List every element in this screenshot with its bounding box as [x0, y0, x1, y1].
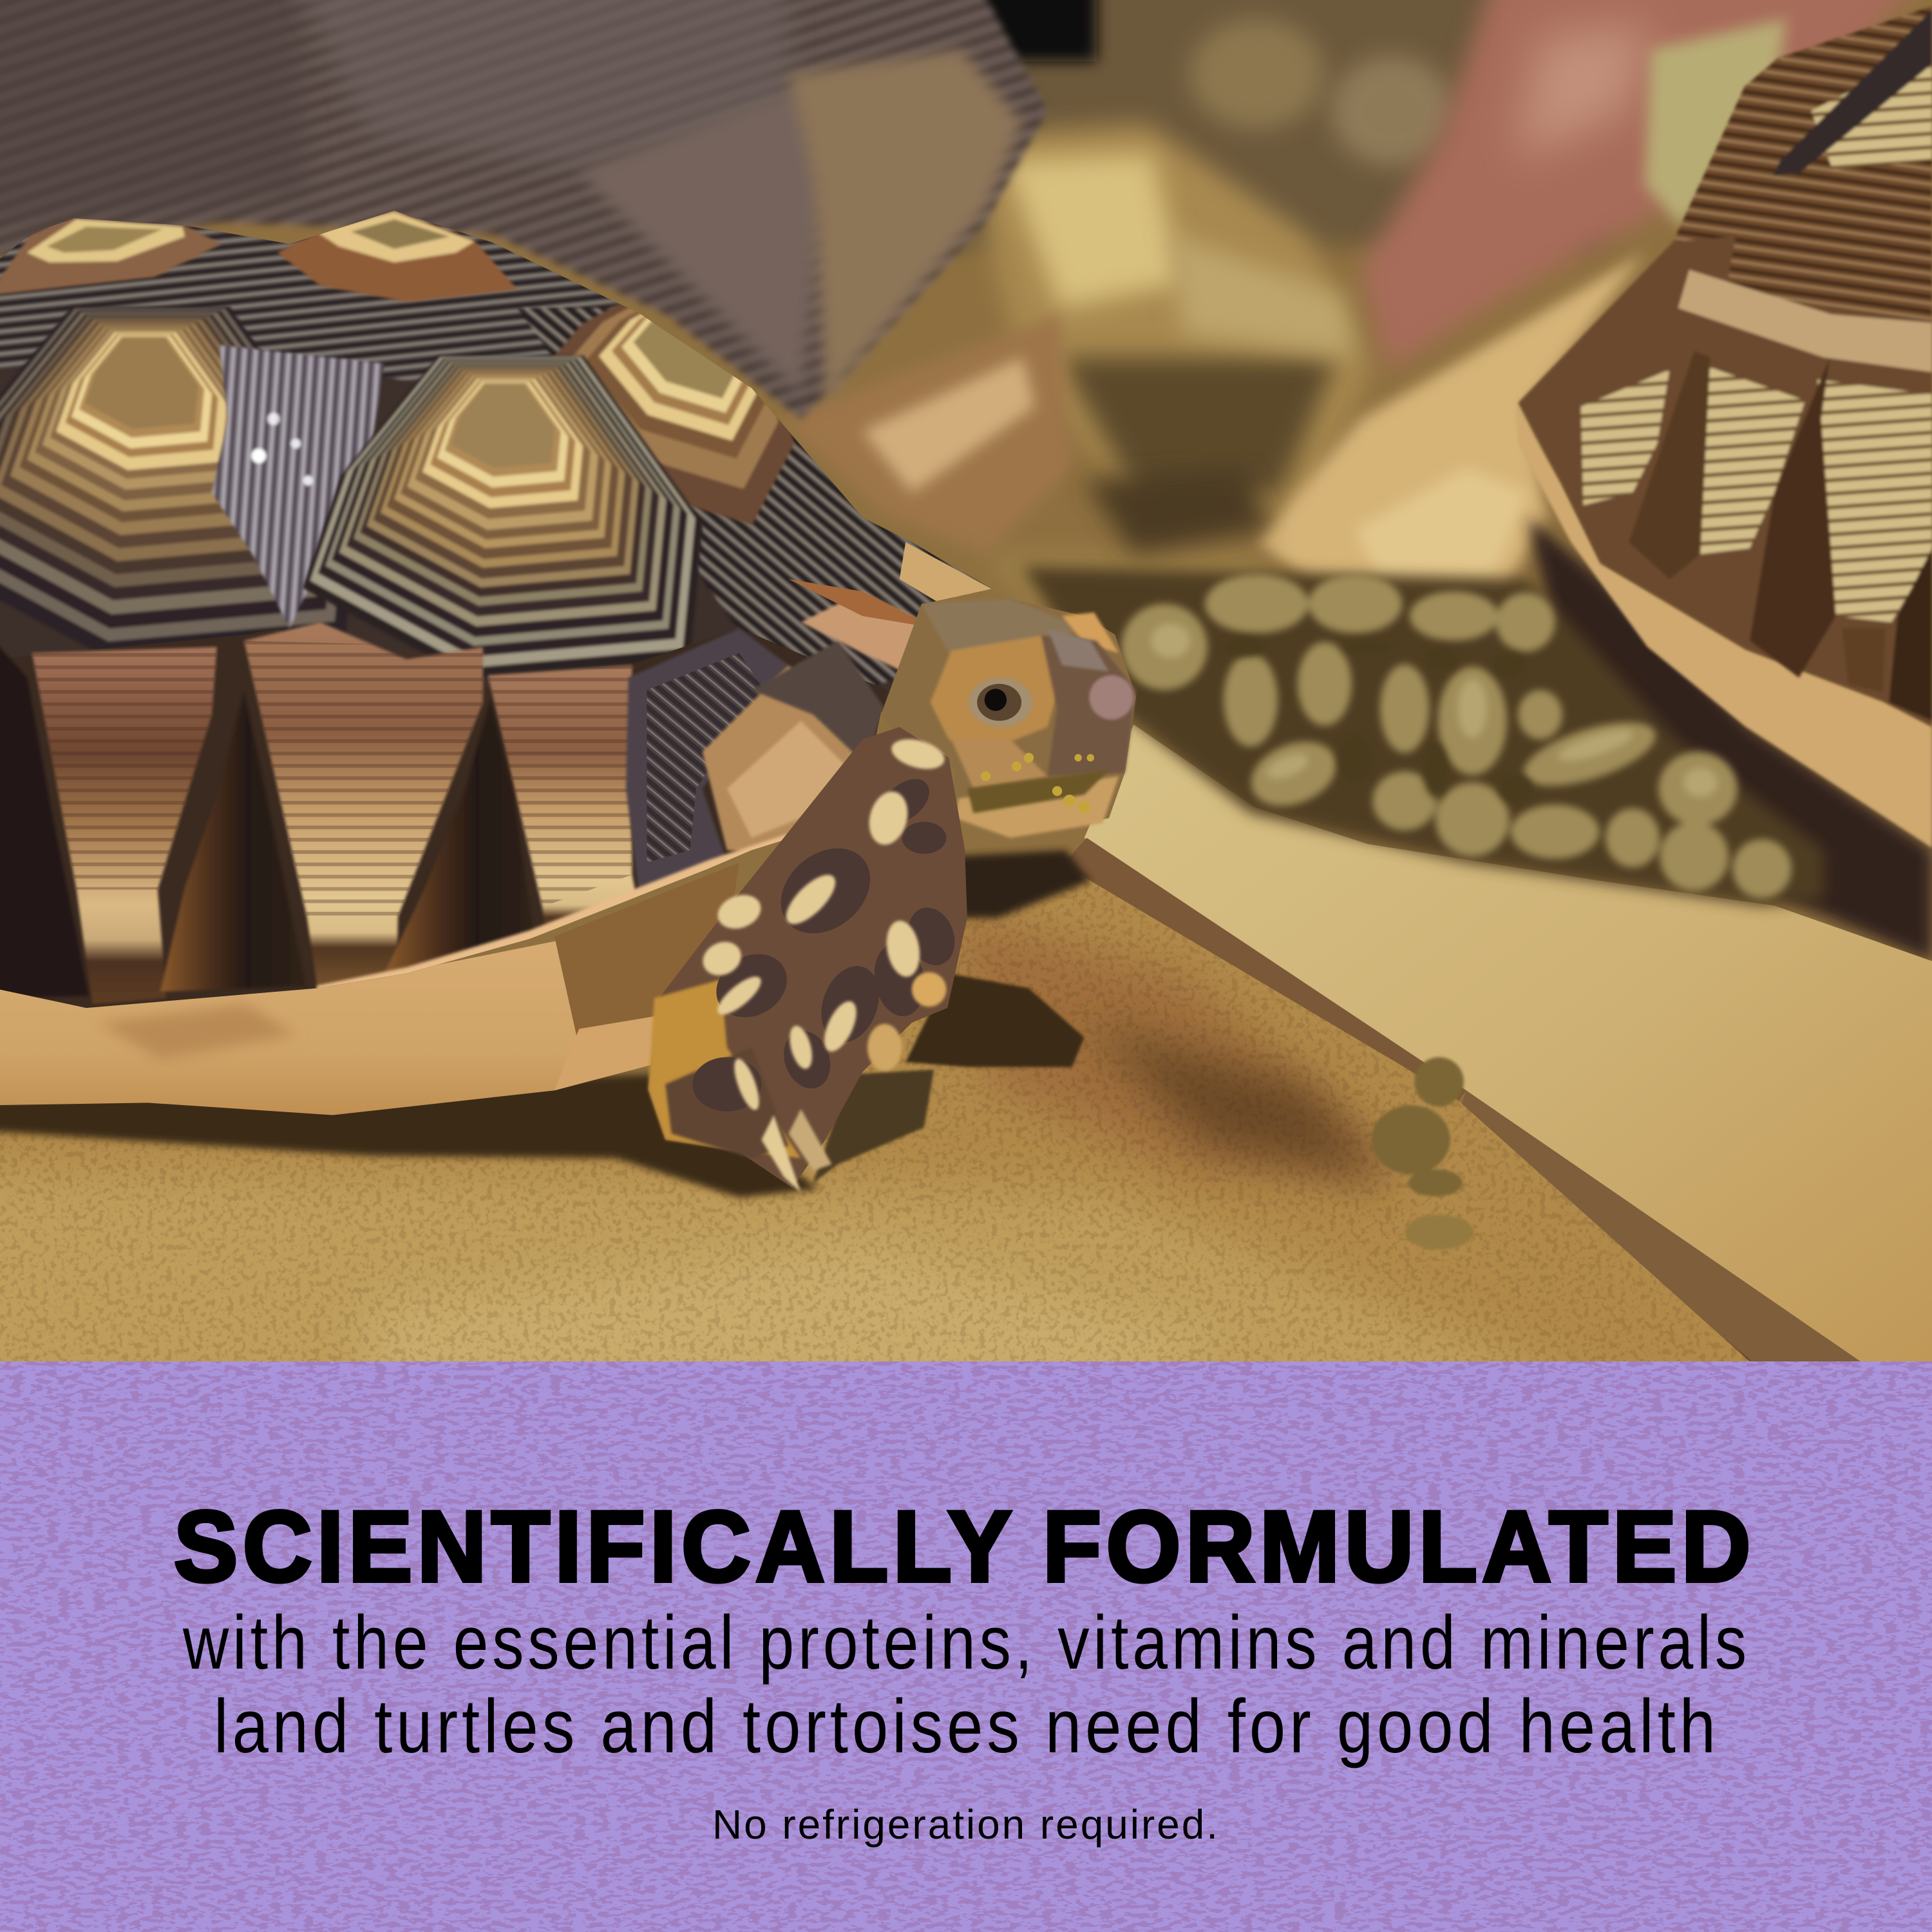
- flap tip: [900, 542, 992, 601]
- right tortoise plastron: [1515, 403, 1932, 848]
- top scute left: [0, 217, 222, 296]
- main tortoise shell: [0, 197, 1004, 1023]
- upper striped band: [0, 209, 690, 394]
- panel: purple textured band: [0, 1361, 1932, 1932]
- marginal scute one: [32, 647, 217, 1004]
- photo base tone: [0, 0, 1932, 1361]
- rim highlight: [317, 813, 857, 1004]
- upper right pale scute: [801, 591, 936, 680]
- dark wedges between scutes: [0, 641, 537, 998]
- blurred background: shells and rocks: [782, 0, 1932, 739]
- shadows under main tortoise: [0, 850, 1090, 1198]
- scute growth lines: [32, 641, 632, 916]
- note: no refrigeration: No refrigeration required.: [712, 1801, 1220, 1848]
- costal scute left: [0, 307, 359, 658]
- dark wedges between scutes: [1629, 351, 1710, 579]
- tortoise front leg: [648, 727, 967, 1193]
- heading: scientifically formulated: SCIENTIFICALLY FORMULATED: [174, 1491, 1756, 1603]
- pellets on ground: [1371, 1057, 1473, 1249]
- back tortoise shell, top left: [0, 0, 1047, 419]
- marginal scute two: [244, 622, 483, 992]
- lower row scutes: [1581, 370, 1669, 505]
- stone slab: [1062, 724, 1932, 1361]
- photo: tortoises eating pellets: [0, 0, 1932, 1392]
- body text line 2: land turtles and tortoises need for good health: [214, 1684, 1719, 1769]
- gray central band between costals: [212, 345, 384, 629]
- icon: tortoise eye: [985, 689, 1007, 711]
- tortoise head: [881, 599, 1136, 838]
- pellet pile: [1023, 567, 1824, 905]
- costal scute center: [303, 355, 703, 678]
- right gray flank: [626, 629, 788, 905]
- main tortoise plastron: [0, 862, 739, 1115]
- top scute center: [277, 209, 518, 302]
- upper rows: [1673, 6, 1932, 242]
- marginal dark base: [0, 629, 887, 1016]
- marginal scute three: [488, 665, 641, 951]
- right striped flank: [518, 308, 998, 690]
- flank lighter scute: [703, 665, 865, 853]
- costal scute right: [507, 240, 836, 540]
- dark shadow behind pellets: [1528, 518, 1932, 961]
- stone ground: [0, 838, 1932, 1392]
- right tortoise shell: [1518, 6, 1932, 727]
